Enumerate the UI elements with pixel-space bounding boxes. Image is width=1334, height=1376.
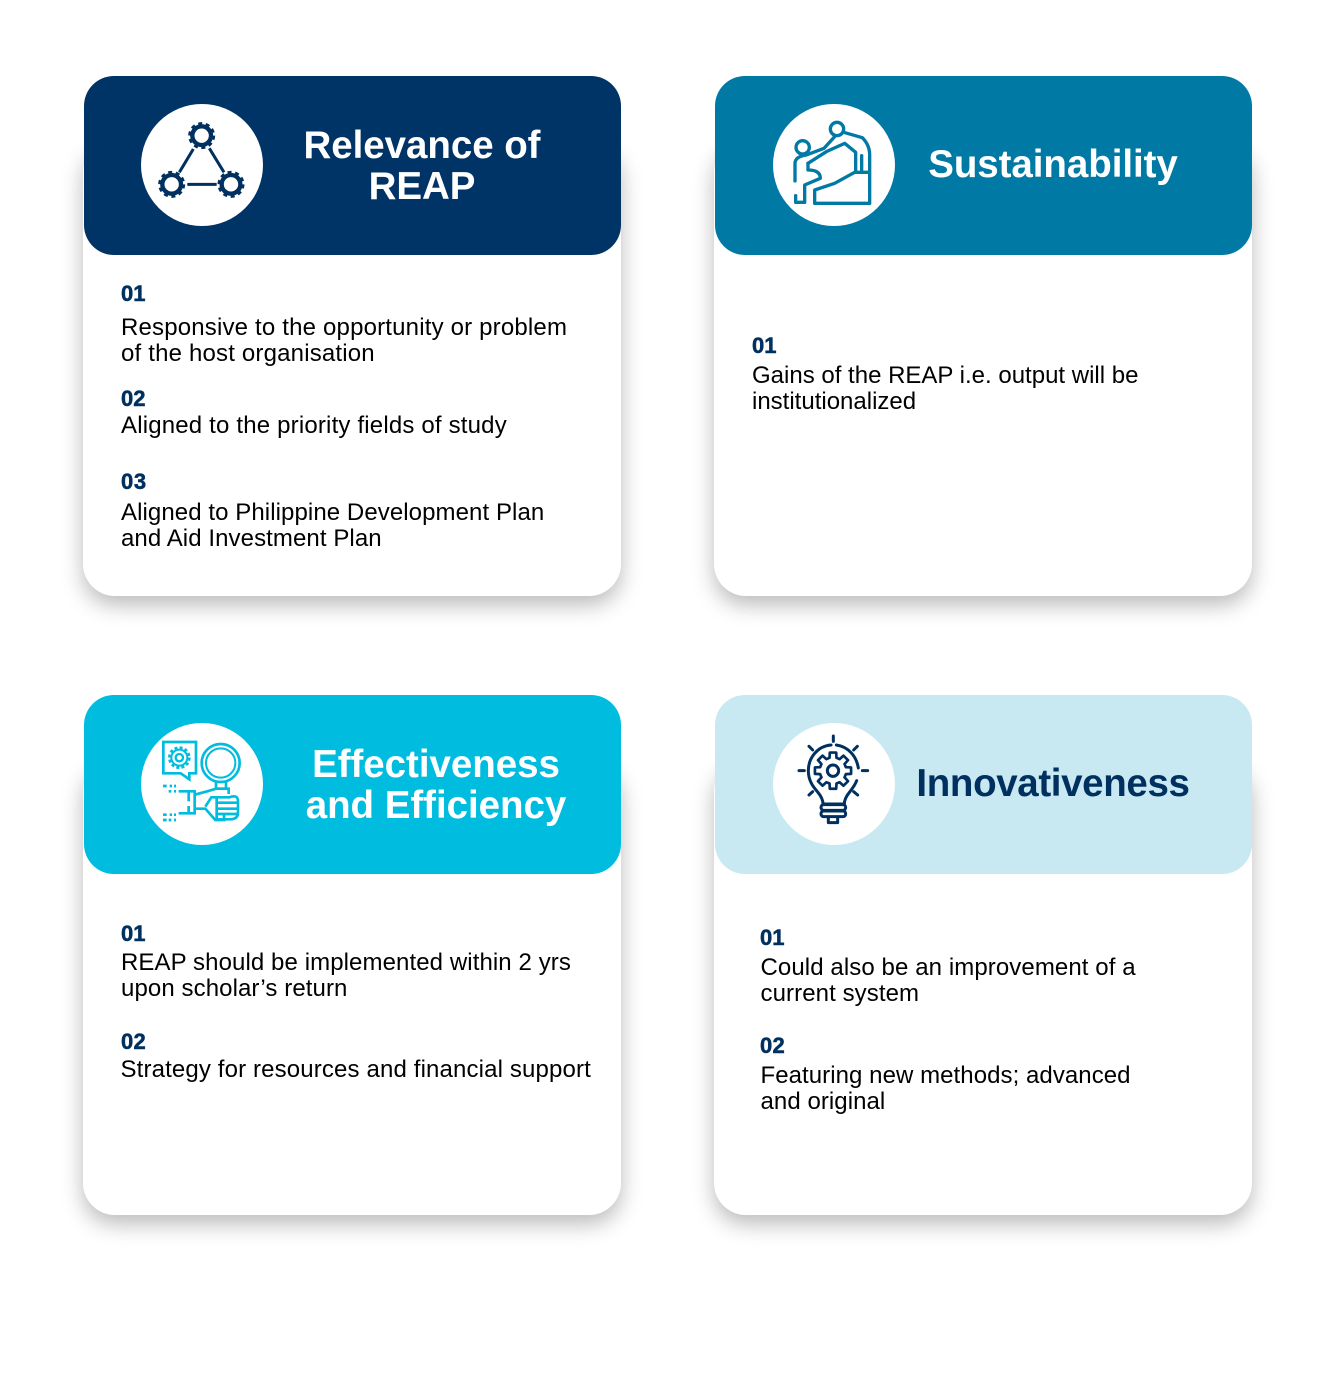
item 01 text: current system xyxy=(760,980,919,1006)
panel: relevance of REAP xyxy=(71,76,633,617)
item 02 text: Aligned to the priority fields of study xyxy=(121,412,507,439)
item 03 text: and Aid Investment Plan xyxy=(121,524,382,552)
card body: innovativeness xyxy=(714,759,1252,1215)
item 02 text: Featuring new methods; advanced xyxy=(760,1062,1131,1089)
heading: effectiveness xyxy=(306,743,566,827)
icon circle: sustainability xyxy=(773,104,895,226)
heading: relevance: REAP xyxy=(369,165,475,208)
card body: sustainability xyxy=(714,140,1252,596)
item 02 text: and original xyxy=(760,1088,885,1114)
item 01 text: Could also be an improvement of a xyxy=(760,954,1136,981)
item 01 text: REAP should be implemented within 2 yrs xyxy=(121,949,571,976)
item 01 text xyxy=(752,362,1138,414)
item 01 text: Gains of the REAP i.e. output will be xyxy=(752,362,1138,389)
item 03 number: 03 xyxy=(121,469,147,494)
item 02 number: 02 xyxy=(121,386,145,411)
item 01 text xyxy=(760,954,1136,1006)
item 01 number: 01 xyxy=(760,925,784,950)
item 01 text: institutionalized xyxy=(752,388,916,414)
icon circle: relevance xyxy=(141,104,263,226)
heading: relevance xyxy=(304,124,541,208)
item 03 text: Aligned to Philippine Development Plan xyxy=(121,499,544,526)
card body: effectiveness xyxy=(83,759,621,1215)
header band: effectiveness xyxy=(84,695,621,874)
item 01 number: 01 xyxy=(121,921,145,946)
heading: effectiveness: and Efficiency xyxy=(306,784,566,827)
icon circle: innovativeness xyxy=(773,723,895,845)
icon: three connected gears xyxy=(158,122,244,198)
heading: innovativeness: Innovativeness xyxy=(916,762,1190,805)
item 02 number: 02 xyxy=(760,1033,785,1058)
item 01 text xyxy=(121,314,567,366)
header band: sustainability xyxy=(715,76,1252,255)
heading: sustainability: Sustainability xyxy=(928,143,1178,186)
heading: relevance: Relevance of xyxy=(304,124,540,167)
icon: people climbing and helping xyxy=(793,120,872,205)
item 01 text xyxy=(121,949,571,1002)
item 03 text xyxy=(121,499,544,552)
item 01 number: 01 xyxy=(121,281,145,306)
icon: magnifier in hand with gear bubble xyxy=(162,740,241,822)
item 01 number: 01 xyxy=(752,333,776,358)
panel: effectiveness and efficiency xyxy=(71,695,633,1236)
panel: innovativeness xyxy=(702,695,1264,1236)
item 02 text: Strategy for resources and financial support xyxy=(120,1056,591,1083)
header band: relevance xyxy=(84,76,621,255)
item 02 text xyxy=(760,1062,1131,1114)
header band: innovativeness xyxy=(715,695,1252,874)
item 02 number: 02 xyxy=(121,1029,146,1054)
item 01 text: of the host organisation xyxy=(121,340,375,366)
icon circle: effectiveness xyxy=(141,723,263,845)
item 01 text: upon scholar’s return xyxy=(121,974,347,1002)
card body: relevance xyxy=(83,140,621,596)
heading: effectiveness: Effectiveness xyxy=(312,743,560,786)
icon: light bulb with gear xyxy=(798,734,870,824)
panel: sustainability xyxy=(702,76,1264,617)
item 01 text: Responsive to the opportunity or problem xyxy=(121,314,567,341)
